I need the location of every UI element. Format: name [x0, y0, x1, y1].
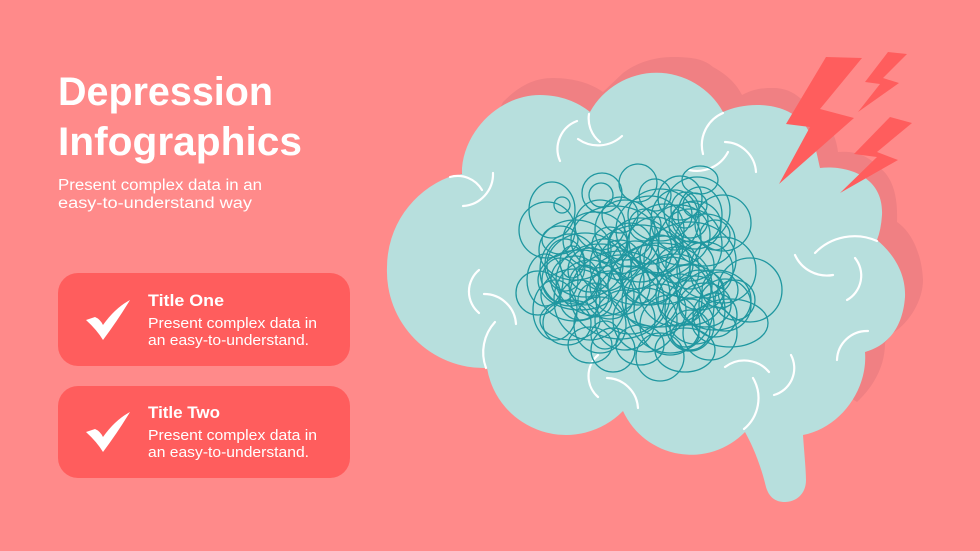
brain shadow: [440, 57, 923, 402]
heading: title one: Title One: [148, 291, 224, 310]
brain: [387, 73, 905, 502]
panel: title two card: [58, 386, 350, 478]
text: title two body: Present complex data in: [148, 427, 317, 444]
subtitle: [58, 177, 262, 212]
subtitle: Present complex data in an: [58, 177, 262, 194]
title: [58, 70, 302, 164]
heading: title two: Title Two: [148, 403, 220, 422]
text: title one body: [148, 315, 317, 349]
title: Infographics: [58, 120, 302, 164]
icon: check mark two: [86, 412, 130, 452]
text: title two body: an easy-to-understand.: [148, 444, 309, 461]
tangled scribble: [516, 164, 782, 381]
subtitle: easy-to-understand way: [58, 195, 252, 212]
text: title one body: Present complex data in: [148, 315, 317, 332]
icon: check mark one: [86, 300, 130, 340]
title: Depression: [58, 70, 273, 114]
text: title one body: an easy-to-understand.: [148, 332, 309, 349]
panel: title one card: [58, 273, 350, 366]
icon: lightning bolts behind: [858, 52, 907, 112]
icon: lightning bolts over brain: [779, 57, 912, 193]
text: title two body: [148, 427, 317, 461]
brain fold lines: [450, 113, 877, 429]
